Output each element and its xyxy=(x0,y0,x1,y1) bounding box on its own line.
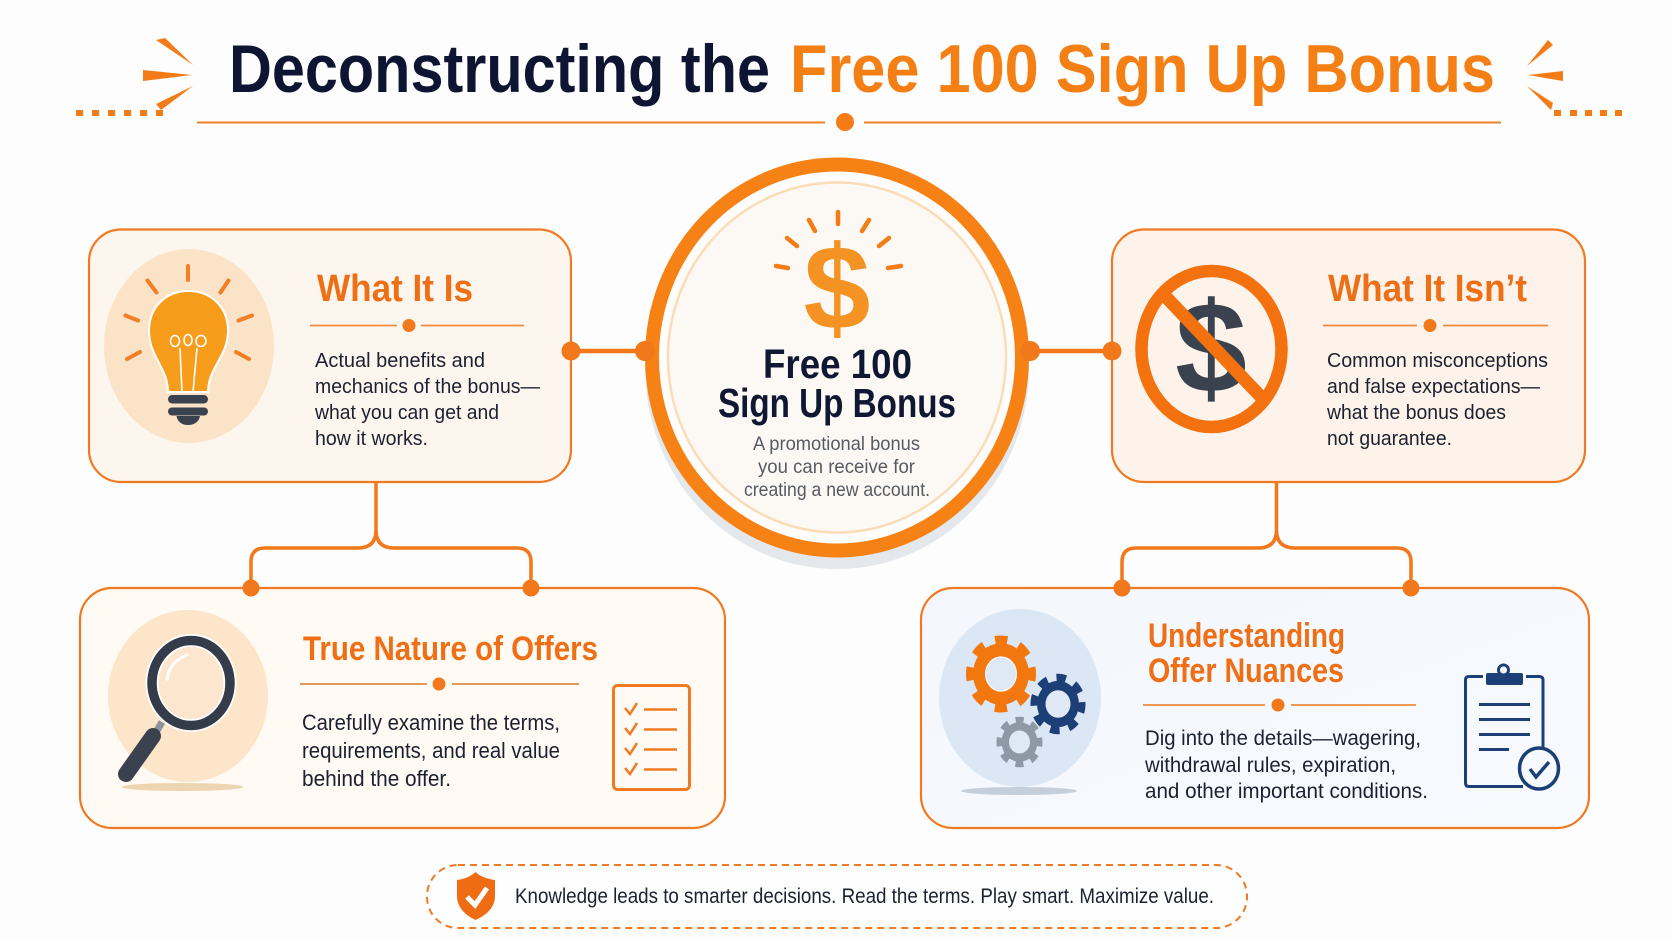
body text xyxy=(1326,349,1548,450)
body text: how it works. xyxy=(315,427,428,450)
gear: orange xyxy=(965,635,1037,713)
gear: navy xyxy=(1032,676,1084,732)
icon: checklist xyxy=(614,686,690,790)
centre description xyxy=(744,433,930,501)
centre description: creating a new account. xyxy=(744,479,930,501)
left title burst decoration xyxy=(76,38,193,116)
body text: and other important conditions. xyxy=(1145,779,1428,803)
body text: what you can get and xyxy=(314,401,499,424)
connector: What It Is to True Nature of Offers xyxy=(251,482,531,588)
body text: Common misconceptions xyxy=(1327,349,1548,372)
icon: crossed-out dollar xyxy=(1142,271,1282,427)
icon: light bulb xyxy=(104,249,274,443)
body text xyxy=(302,710,560,791)
panel: Understanding Offer Nuances xyxy=(921,580,1589,828)
callout text: Knowledge leads to smarter decisions. Read the terms. Play smart. Maximize value. xyxy=(515,885,1214,908)
divider xyxy=(1143,698,1416,712)
body text xyxy=(314,349,540,450)
panel: centre circle xyxy=(645,164,1029,569)
heading: True Nature of Offers: True Nature of Offers xyxy=(303,630,598,668)
connector: What It Isn't to Understanding Offer Nuances xyxy=(1122,482,1411,588)
body text: Dig into the details—wagering, xyxy=(1145,726,1421,750)
icon: magnifying glass xyxy=(108,610,268,791)
panel: True Nature of Offers xyxy=(80,580,725,828)
heading: What It Is: What It Is xyxy=(317,268,473,310)
body text: what the bonus does xyxy=(1326,401,1506,424)
body text: Actual benefits and xyxy=(315,349,485,372)
divider xyxy=(310,319,524,332)
divider xyxy=(300,678,579,690)
icon: shield check xyxy=(457,872,495,920)
heading: Understanding Offer Nuances xyxy=(1148,617,1345,690)
body text: and false expectations— xyxy=(1327,375,1540,398)
right title burst decoration xyxy=(1527,40,1622,116)
body text: not guarantee. xyxy=(1327,427,1452,450)
centre heading xyxy=(718,341,956,426)
centre heading: Sign Up Bonus xyxy=(718,380,956,426)
centre heading: Free 100 xyxy=(763,341,912,387)
connector: left card to centre xyxy=(562,341,655,361)
heading: What It Isn't: What It Isn’t xyxy=(1328,268,1527,310)
body text xyxy=(1144,726,1428,803)
body text: behind the offer. xyxy=(302,766,451,791)
title xyxy=(229,31,1495,107)
connector: centre to right card xyxy=(1020,341,1122,361)
panel: What It Isn't xyxy=(1112,230,1585,482)
body text: mechanics of the bonus— xyxy=(315,375,540,398)
body text: Carefully examine the terms, xyxy=(302,710,560,735)
gear: gray xyxy=(996,716,1043,768)
centre description: you can receive for xyxy=(758,456,915,478)
callout: bottom takeaway xyxy=(427,865,1247,928)
divider xyxy=(1323,319,1548,332)
icon: clipboard with check xyxy=(1466,665,1558,789)
heading: Understanding Offer Nuances: Offer Nuances xyxy=(1148,652,1344,690)
title: Deconstructing the xyxy=(229,31,770,107)
icon: crossed-out dollar: $ xyxy=(1175,276,1247,420)
icon: dollar with rays: $ xyxy=(804,221,870,355)
panel: What It Is xyxy=(89,230,571,482)
heading: Understanding Offer Nuances: Understanding xyxy=(1148,617,1345,655)
title: Free 100 Sign Up Bonus xyxy=(790,31,1495,107)
body text: withdrawal rules, expiration, xyxy=(1144,753,1396,777)
icon: dollar with rays xyxy=(776,212,901,355)
title underline xyxy=(197,113,1501,131)
icon: gears xyxy=(939,609,1101,795)
centre description: A promotional bonus xyxy=(753,433,920,455)
body text: requirements, and real value xyxy=(302,738,560,763)
